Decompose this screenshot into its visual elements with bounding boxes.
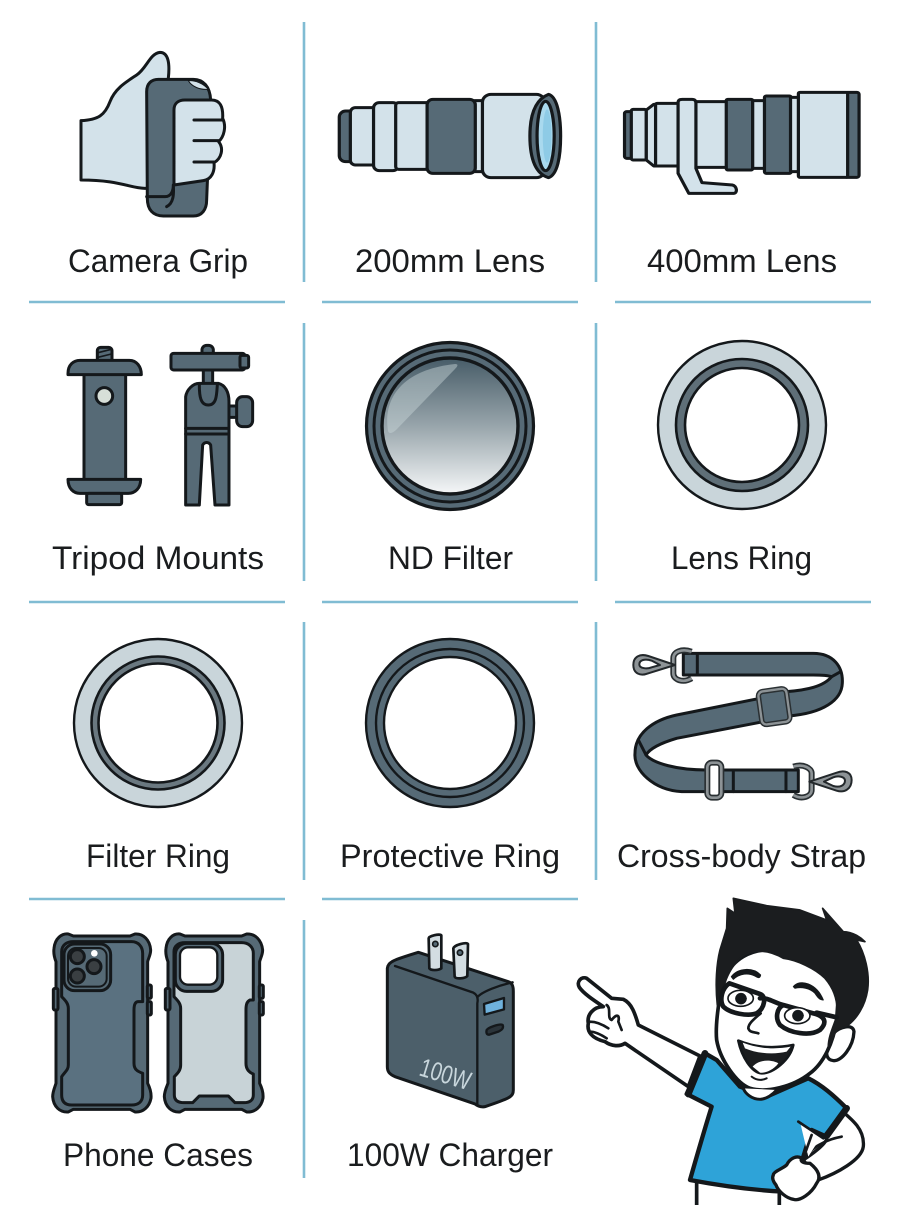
panel: cross-body strap: [617, 650, 866, 874]
label: Camera Grip: Camera Grip: [68, 243, 248, 279]
character ear: [827, 1027, 854, 1061]
label: Tripod Mounts: Tripod Mounts: [52, 540, 264, 576]
panel: 200mm lens: [339, 94, 561, 279]
icon: 200mm lens: [339, 94, 561, 178]
character shirt: [687, 1053, 847, 1192]
character thumb-up fist: [773, 1157, 819, 1200]
character glasses: [721, 983, 837, 1034]
label: Protective Ring: Protective Ring: [340, 838, 560, 874]
cartoon man pointing: [578, 898, 868, 1205]
label: Cross-body Strap: Cross-body Strap: [617, 838, 866, 874]
label: 200mm Lens: 200mm Lens: [355, 243, 545, 279]
character eyebrows: [731, 969, 823, 1000]
panel: tripod mounts: [52, 345, 264, 576]
label: ND Filter: ND Filter: [388, 540, 513, 576]
icon: lens ring: [658, 341, 826, 509]
panel: lens ring: [658, 341, 826, 576]
character pointing arm and hand: [578, 978, 700, 1087]
character legs and far arm: [697, 1107, 863, 1205]
panel: camera grip: [68, 52, 248, 279]
panel: 400mm lens: [625, 92, 859, 279]
panel: protective ring: [340, 639, 560, 874]
panel: ND filter: [366, 342, 534, 576]
label: Lens Ring: Lens Ring: [671, 540, 812, 576]
icon: ball head tripod mount: [171, 345, 253, 505]
icon: phone case interior: [164, 934, 263, 1112]
label: Phone Cases: Phone Cases: [63, 1137, 253, 1173]
label: 100W printed on charger: 100W: [416, 1052, 475, 1096]
character face: [716, 950, 838, 1099]
character nose: [748, 1013, 761, 1033]
icon: protective ring: [366, 639, 534, 807]
character eyes: [728, 990, 810, 1024]
panel: filter ring: [74, 639, 242, 874]
icon: 400mm lens: [625, 92, 859, 193]
character hair: [716, 898, 868, 1047]
panel: 100W charger: [347, 935, 553, 1173]
character open mouth: [738, 1041, 793, 1080]
icon: phone case with camera: [53, 934, 151, 1112]
icon: filter ring: [74, 639, 242, 807]
label: Filter Ring: Filter Ring: [86, 838, 230, 874]
icon: hand holding camera grip: [81, 52, 225, 216]
icon: strap: [633, 650, 852, 798]
label: 400mm Lens: 400mm Lens: [647, 243, 837, 279]
panel: phone cases: [53, 934, 263, 1173]
icon: 100W charger: [387, 935, 513, 1107]
icon: tripod mount column: [68, 347, 141, 505]
label: 100W Charger: 100W Charger: [347, 1137, 553, 1173]
icon: ND filter: [366, 342, 534, 510]
